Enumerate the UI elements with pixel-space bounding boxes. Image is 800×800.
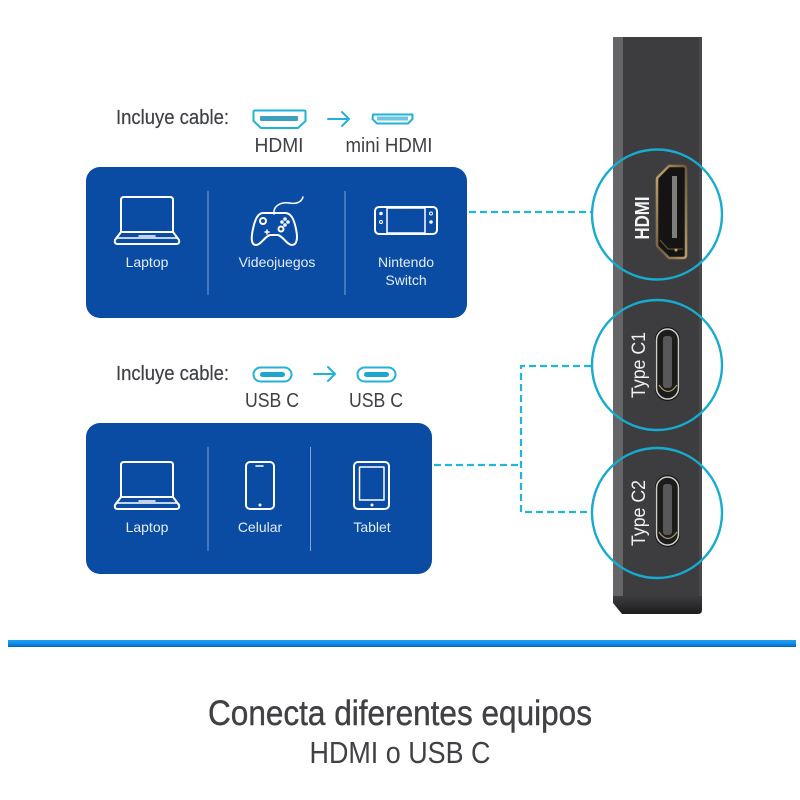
label: Laptop: Laptop (126, 519, 169, 535)
icon: HDMI connector (254, 110, 306, 128)
port: Type C2 (655, 475, 680, 547)
icon: USB C connector left (254, 368, 292, 382)
callout ring: Type C1 (592, 300, 722, 430)
icon: tablet (354, 462, 389, 509)
arrow: HDMI to mini HDMI (328, 112, 349, 126)
port label: HDMI: HDMI (632, 196, 654, 240)
label: USB C right: USB C (349, 390, 403, 412)
heading: included cable USB C: Incluye cable: (116, 363, 229, 385)
panel: HDMI devices (86, 167, 467, 318)
label: Nintendo: Nintendo (378, 254, 434, 270)
icon: laptop (115, 197, 179, 244)
label: Videojuegos: Videojuegos (239, 254, 315, 270)
icon: laptop (115, 462, 179, 509)
icon: USB C connector right (358, 368, 396, 382)
title: Conecta diferentes equipos (208, 694, 592, 733)
icon: game controller (252, 197, 303, 245)
icon: Nintendo Switch (375, 207, 437, 234)
arrow: USB C to USB C (314, 367, 335, 381)
connector lines: HDMI (469, 211, 591, 213)
label: Laptop: Laptop (126, 254, 169, 270)
device: monitor side edge (613, 37, 702, 614)
subtitle: HDMI o USB C (310, 735, 490, 770)
heading: included cable HDMI: Incluye cable: (116, 107, 229, 129)
label: HDMI: HDMI (254, 135, 304, 157)
label: Switch: Switch (385, 272, 427, 288)
port label: Type C1: Type C1 (629, 332, 650, 398)
callout ring: HDMI (592, 150, 722, 280)
port: HDMI (657, 166, 686, 258)
label: mini HDMI: mini HDMI (346, 135, 432, 157)
port: Type C1 (655, 327, 680, 401)
icon: mini HDMI connector (372, 114, 412, 124)
panel: USB C devices (86, 423, 432, 574)
label: Tablet: Tablet (353, 519, 391, 535)
icon: phone (246, 462, 274, 509)
callout ring: Type C2 (592, 448, 722, 578)
divider bar (8, 640, 796, 647)
port label: Type C2: Type C2 (629, 480, 650, 546)
label: Celular: Celular (238, 519, 283, 535)
label: USB C left: USB C (245, 390, 299, 412)
connector lines: USB C (434, 366, 591, 512)
